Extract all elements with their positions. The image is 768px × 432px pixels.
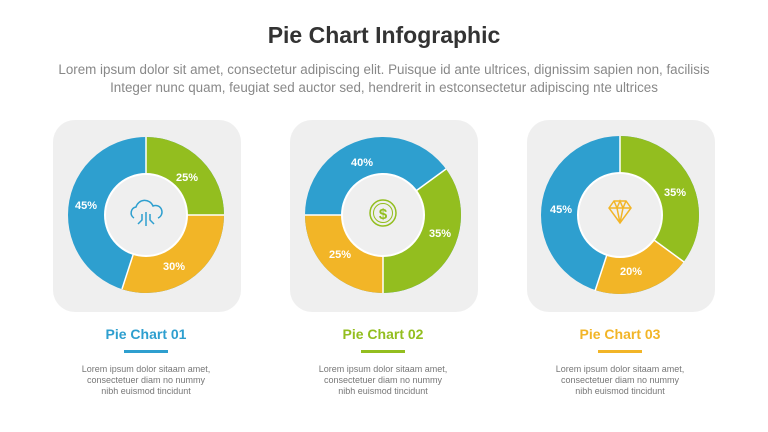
subtitle: Integer nunc quam, feugiat sed auctor sed, hendrerit in estconsectetur adipiscing nte ultrices bbox=[110, 80, 658, 95]
heading: Pie Chart 02: Pie Chart 02 bbox=[343, 326, 423, 342]
donut chart 3 bbox=[550, 136, 686, 291]
donut chart 2: 35% bbox=[429, 228, 451, 240]
panel: chart 3 background bbox=[527, 120, 715, 312]
donut chart 2 bbox=[305, 156, 451, 293]
text block 3: nibh euismod tincidunt bbox=[575, 386, 665, 396]
donut chart 1: 45% bbox=[75, 200, 97, 212]
donut chart 2: 25% bbox=[329, 249, 351, 261]
donut chart 3: 20% bbox=[620, 266, 642, 278]
donut chart 3: 35% bbox=[664, 187, 686, 199]
donut chart 2: 40% bbox=[351, 157, 373, 169]
icon: dollar coin: $ bbox=[379, 206, 388, 223]
subtitle: Lorem ipsum dolor sit amet, consectetur adipiscing elit. Puisque id ante ultrices, dignissim sapien non, facilisis bbox=[58, 62, 710, 77]
subtitle bbox=[58, 62, 710, 95]
text block 1: Lorem ipsum dolor sitaam amet, bbox=[82, 364, 210, 374]
icon: cloud network bbox=[131, 200, 162, 226]
heading: Pie Chart 01: Pie Chart 01 bbox=[106, 326, 186, 342]
donut chart 1 bbox=[75, 137, 224, 289]
text block 1: nibh euismod tincidunt bbox=[101, 386, 191, 396]
text block 2 bbox=[319, 364, 447, 396]
underline 3 bbox=[598, 350, 642, 353]
text block 2: nibh euismod tincidunt bbox=[338, 386, 428, 396]
text block 2: Lorem ipsum dolor sitaam amet, bbox=[319, 364, 447, 374]
text block 1: consectetuer diam no nummy bbox=[87, 375, 205, 385]
panel: chart 2 background bbox=[290, 120, 478, 312]
text block 3 bbox=[556, 364, 684, 396]
text block 3: Lorem ipsum dolor sitaam amet, bbox=[556, 364, 684, 374]
icon: dollar coin bbox=[370, 200, 396, 226]
underline 2 bbox=[361, 350, 405, 353]
text block 3: consectetuer diam no nummy bbox=[561, 375, 679, 385]
donut chart 3: 45% bbox=[550, 204, 572, 216]
panel: chart 1 background bbox=[53, 120, 241, 312]
title: Pie Chart Infographic bbox=[268, 22, 500, 48]
icon: diamond bbox=[609, 201, 631, 223]
text block 2: consectetuer diam no nummy bbox=[324, 375, 442, 385]
donut chart 1: 30% bbox=[163, 261, 185, 273]
underline 1 bbox=[124, 350, 168, 353]
donut chart 1: 25% bbox=[176, 172, 198, 184]
text block 1 bbox=[82, 364, 210, 396]
heading: Pie Chart 03: Pie Chart 03 bbox=[580, 326, 660, 342]
